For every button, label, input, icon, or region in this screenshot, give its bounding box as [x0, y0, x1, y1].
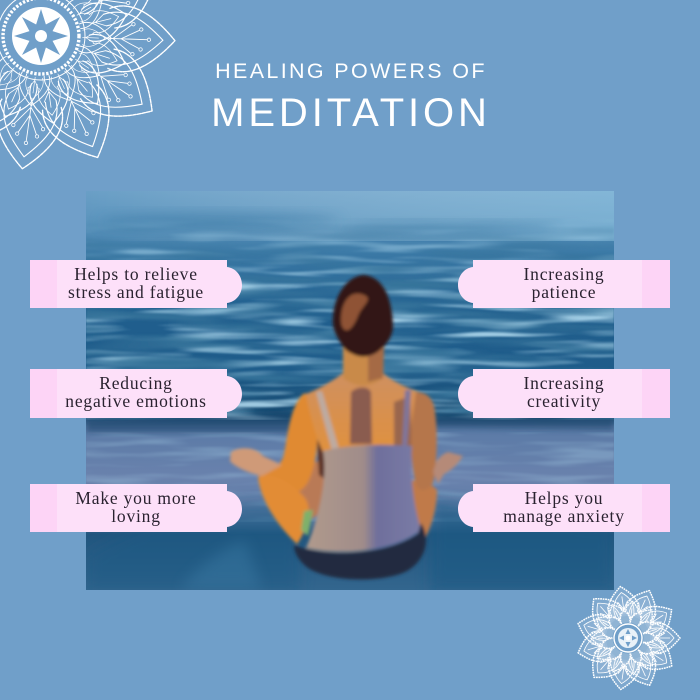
- woman: [230, 275, 463, 579]
- label tab: [642, 260, 670, 308]
- label text: Make you more: [75, 488, 197, 508]
- left hand: [230, 448, 282, 476]
- back: [306, 373, 419, 452]
- label shape: [458, 260, 670, 308]
- hair: [333, 275, 393, 357]
- label text: Helps you: [525, 488, 603, 508]
- label text: Helps to relieve: [74, 264, 198, 284]
- sea: [86, 191, 614, 590]
- photo: woman meditating by the sea: [86, 191, 614, 590]
- shorts: [294, 523, 426, 579]
- label shape: [458, 484, 670, 532]
- mandala: bottom right: [574, 584, 680, 692]
- label shape: [458, 369, 670, 418]
- label text: Reducing: [99, 373, 173, 393]
- label tab: [30, 484, 57, 532]
- left thigh: [258, 475, 309, 544]
- title: [211, 59, 491, 135]
- green cloth: [301, 510, 313, 536]
- label: increasing patience: [458, 260, 670, 308]
- label: reducing negative emotions: [30, 369, 242, 418]
- straps: [316, 391, 339, 451]
- label text: patience: [532, 282, 596, 302]
- near thigh shadow: [298, 460, 326, 520]
- title line 2: MEDITATION: [211, 91, 491, 135]
- label: helps you manage anxiety: [458, 484, 670, 532]
- label shape: [30, 484, 242, 532]
- tank top: [306, 445, 421, 552]
- label: make you more loving: [30, 484, 242, 532]
- far leg: [407, 480, 437, 540]
- label text: creativity: [527, 391, 601, 411]
- label tab: [642, 484, 670, 532]
- label text: Increasing: [524, 373, 604, 393]
- label shape: [30, 369, 242, 418]
- label text: Increasing: [524, 264, 604, 284]
- mandala: top left corner: [0, 0, 176, 173]
- left arm and shoulder: [258, 393, 318, 495]
- label shape: [30, 260, 242, 308]
- label text: negative emotions: [65, 391, 207, 411]
- label tab: [30, 369, 57, 418]
- label tab: [30, 260, 57, 308]
- right arm: [411, 392, 437, 490]
- label: helps to relieve stress and fatigue: [30, 260, 242, 308]
- title line 1: HEALING POWERS OF: [215, 59, 487, 83]
- label tab: [642, 369, 670, 418]
- neck: [343, 345, 384, 386]
- label text: stress and fatigue: [68, 282, 204, 302]
- label text: manage anxiety: [503, 506, 625, 526]
- label: increasing creativity: [458, 369, 670, 418]
- label text: loving: [111, 506, 161, 526]
